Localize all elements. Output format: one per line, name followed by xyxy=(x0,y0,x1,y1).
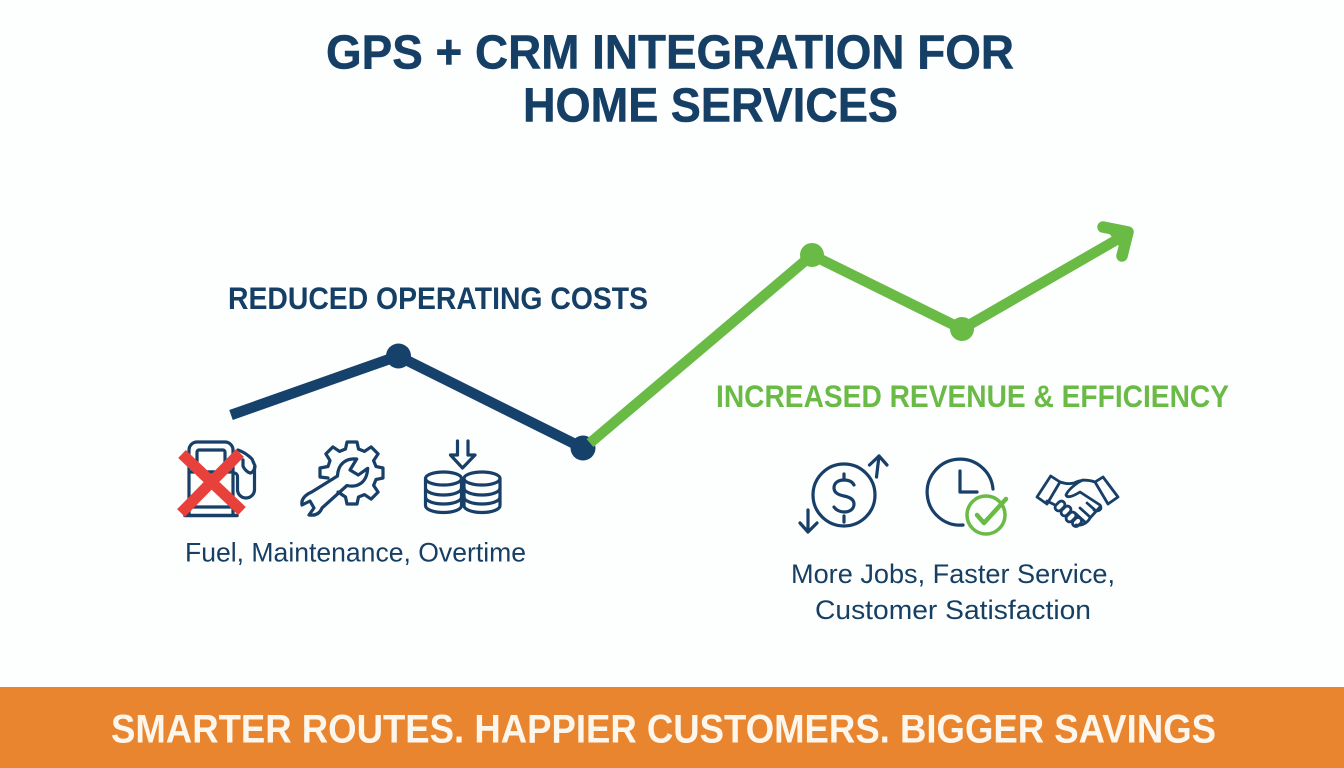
icon: wrench and gear xyxy=(302,442,383,515)
label: more jobs, faster service, customer satisfaction: Customer Satisfaction xyxy=(815,595,1091,625)
label: more jobs, faster service, customer satisfaction: More Jobs, Faster Service, xyxy=(791,559,1115,589)
heading: increased revenue and efficiency: INCREASED REVENUE & EFFICIENCY xyxy=(716,378,1229,414)
label: more jobs, faster service, customer satisfaction xyxy=(791,559,1115,625)
line chart: costs falling then revenue rising xyxy=(231,227,1128,460)
heading: reduced operating costs: REDUCED OPERATING COSTS xyxy=(228,280,648,316)
title: GPS + CRM INTEGRATION FOR xyxy=(326,26,1014,80)
footer banner xyxy=(0,687,1344,768)
icon: handshake xyxy=(1037,476,1118,528)
title xyxy=(326,26,1014,132)
icon: clock with green check xyxy=(927,459,1006,534)
icon: coin stacks with down arrow xyxy=(426,441,500,512)
icon: fuel pump crossed out xyxy=(181,442,255,516)
navy cost line xyxy=(231,344,596,460)
label: fuel, maintenance, overtime: Fuel, Maintenance, Overtime xyxy=(185,538,526,568)
title: HOME SERVICES xyxy=(523,78,898,132)
icon: dollar with up and down arrows xyxy=(800,456,887,532)
footer tagline: SMARTER ROUTES. HAPPIER CUSTOMERS. BIGGER SAVINGS xyxy=(111,708,1216,752)
green revenue line with arrow xyxy=(590,227,1128,443)
